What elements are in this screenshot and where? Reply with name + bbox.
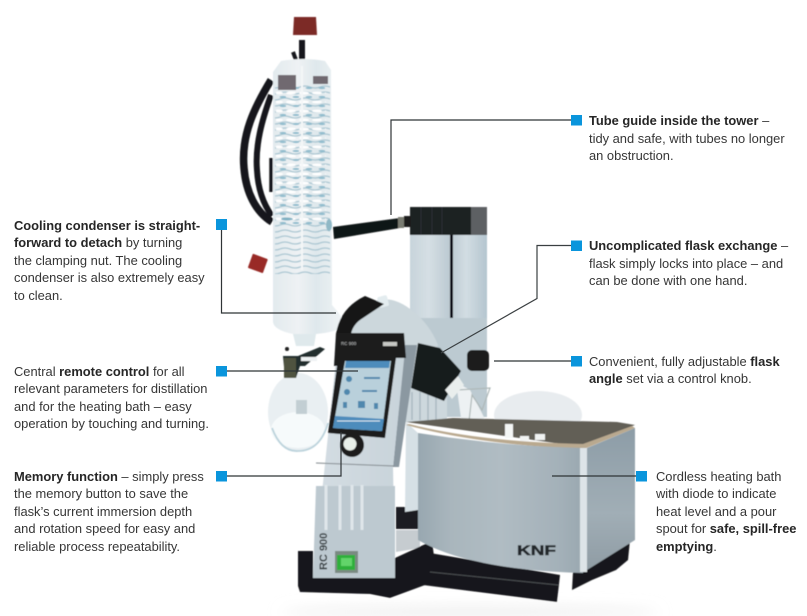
control head bbox=[328, 333, 406, 438]
text: cooling condenser bbox=[14, 218, 205, 303]
text: heating bath: spout for safe, spill-free bbox=[656, 521, 796, 536]
cooling condenser glass bbox=[273, 59, 345, 346]
text: cooling condenser: to clean. bbox=[14, 288, 63, 303]
text: memory function: Memory function – simply press bbox=[14, 468, 204, 484]
text: remote control bbox=[14, 364, 209, 431]
text: heating bath: emptying. bbox=[656, 539, 717, 554]
text: memory function: reliable process repeatability. bbox=[14, 539, 180, 554]
red top cap bbox=[293, 17, 317, 35]
text: flask exchange bbox=[589, 238, 788, 288]
floor shadow bbox=[280, 607, 660, 616]
text: flask exchange: can be done with one hand. bbox=[589, 273, 747, 288]
text: flask angle bbox=[589, 354, 780, 386]
text: flask angle: Convenient, fully adjustable flask bbox=[589, 354, 780, 368]
power switch bbox=[335, 551, 358, 573]
text: heating bath bbox=[656, 468, 796, 554]
text: memory function: and rotation speed for easy and bbox=[14, 521, 195, 536]
text: cooling condenser: the clamping nut. The cooling bbox=[14, 253, 182, 268]
text: tube guide: Tube guide inside the tower – bbox=[589, 113, 769, 128]
heating bath bbox=[405, 418, 635, 573]
KNF logo: KNF bbox=[517, 542, 557, 558]
text: remote control: Central remote control for all bbox=[14, 364, 184, 378]
glass vapour duct and receiving flask dome bbox=[456, 382, 582, 439]
memory knob bbox=[340, 433, 364, 457]
rotary drive housing bbox=[336, 295, 438, 375]
condenser hoses bbox=[244, 40, 302, 222]
text: memory function bbox=[14, 468, 204, 554]
text: tube guide: tidy and safe, with tubes no longer bbox=[589, 131, 785, 146]
text: cooling condenser: forward to detach by turning bbox=[14, 235, 182, 250]
text: flask exchange: Uncomplicated flask exchange – bbox=[589, 238, 788, 253]
base highlight bbox=[430, 572, 558, 585]
black base bbox=[298, 540, 630, 602]
tower bbox=[404, 207, 487, 422]
text: tube guide: an obstruction. bbox=[589, 148, 674, 163]
text: heating bath: heat level and a pour bbox=[656, 504, 776, 519]
text: tube guide bbox=[589, 113, 785, 163]
text: cooling condenser: condenser is also extremely easy bbox=[14, 270, 205, 285]
text: remote control: relevant parameters for distillation bbox=[14, 381, 207, 396]
flask angle knob bbox=[467, 350, 489, 371]
text: remote control: and for the heating bath – easy bbox=[14, 399, 192, 414]
text: memory function: the memory button to save the bbox=[14, 486, 188, 501]
flask clamp bbox=[283, 347, 325, 378]
remote control column bbox=[313, 345, 420, 578]
text: flask exchange: flask simply locks into place – and bbox=[589, 256, 783, 271]
black joint bbox=[411, 343, 461, 401]
evaporating flask bbox=[268, 373, 328, 451]
white nozzle bbox=[445, 376, 464, 399]
tube to tower bbox=[333, 216, 411, 239]
text: remote control: operation by touching and turning. bbox=[14, 416, 209, 431]
head model label: RC 900 bbox=[341, 341, 357, 346]
red clamping nut bbox=[248, 254, 268, 273]
head indicator bbox=[383, 342, 397, 346]
text: flask angle: angle set via a control knob. bbox=[589, 371, 752, 386]
column model text: RC 900 bbox=[318, 533, 330, 570]
text: memory function: flask’s current immersion depth bbox=[14, 504, 192, 519]
text: heating bath: with diode to indicate bbox=[656, 486, 776, 501]
touch screen bbox=[333, 361, 391, 431]
text: cooling condenser: Cooling condenser is straight- bbox=[14, 218, 200, 232]
text: heating bath: Cordless heating bath bbox=[656, 468, 781, 484]
